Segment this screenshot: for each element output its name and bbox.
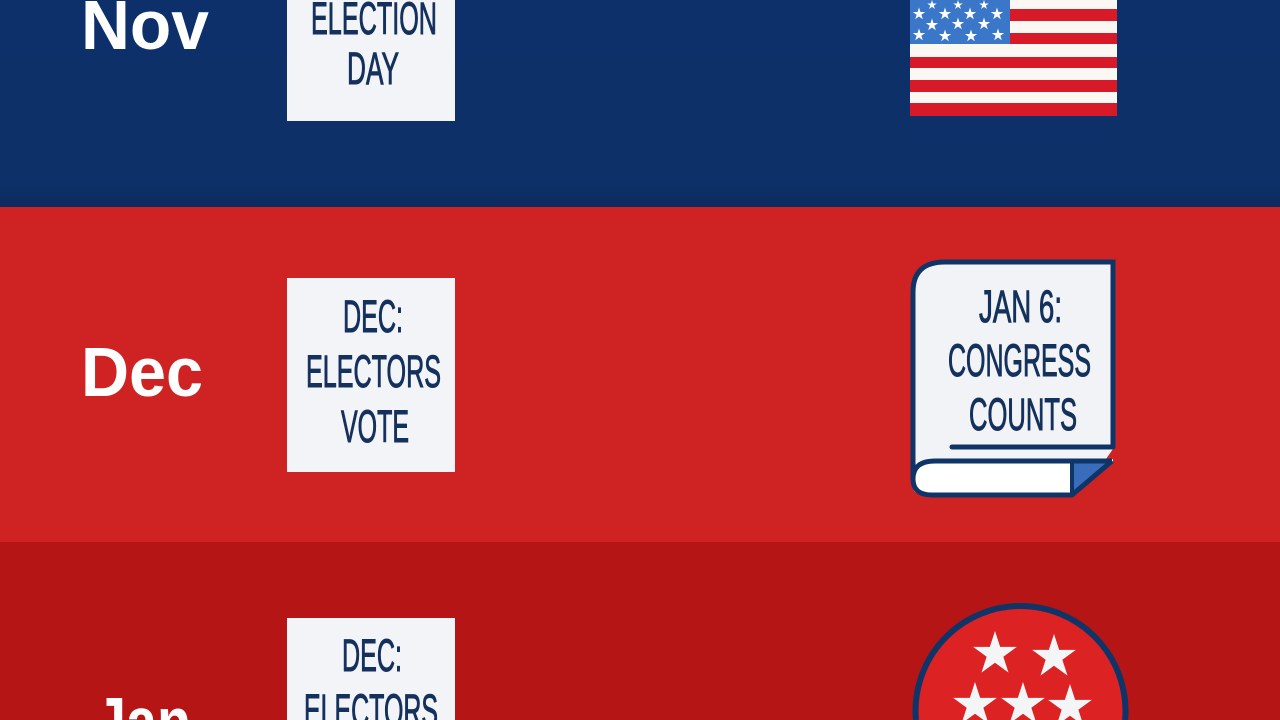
- icon: book, Congress counts: [913, 262, 1113, 495]
- card: Electors Vote repeated: [287, 618, 455, 720]
- panel: November band: [0, 0, 1280, 207]
- card: Electors Vote: VOTE: [341, 401, 409, 452]
- icon: American flag: [910, 0, 1117, 116]
- card: Electors Vote repeated: DEC:: [342, 630, 402, 681]
- card: Electors Vote: [287, 278, 455, 472]
- card: Electors Vote: ELECTORS: [306, 346, 441, 397]
- month label: Dec: Dec: [81, 333, 203, 411]
- card: Election Day: DAY: [347, 43, 399, 94]
- panel: January band: [0, 542, 1280, 720]
- icon: seal with stars: [916, 606, 1125, 720]
- icon: book, Congress counts: JAN 6:: [979, 281, 1062, 332]
- icon: book, Congress counts: CONGRESS: [948, 335, 1091, 386]
- card: Electors Vote: DEC:: [343, 291, 403, 342]
- icon: book, Congress counts: COUNTS: [969, 389, 1077, 440]
- card: Election Day: [287, 0, 455, 121]
